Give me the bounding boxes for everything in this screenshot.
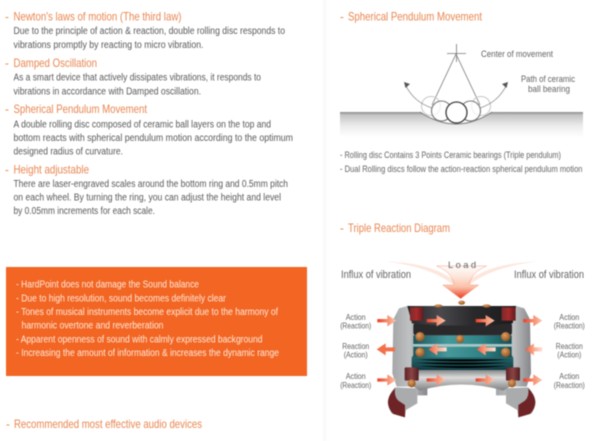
- lower black disc: [413, 323, 512, 335]
- teal discs: [413, 335, 512, 344]
- text: Damped Oscillation description: vibrations in accordance with Damped oscillation.: [14, 86, 201, 98]
- orange box background: [6, 267, 307, 376]
- heading: Spherical Pendulum Movement: Spherical Pendulum Movement: [14, 103, 148, 116]
- right side labels: Reaction: [556, 342, 583, 351]
- left side labels: (Reaction): [340, 322, 371, 331]
- right housing: [496, 306, 531, 395]
- benefits list: - Apparent openness of sound with calmly expressed background: [16, 334, 262, 346]
- ground surface: [340, 112, 583, 137]
- ceramic balls: [408, 301, 516, 387]
- text: Spherical Pendulum description: designed radius of curvature.: [14, 146, 123, 158]
- curved dent in ground: [420, 109, 492, 124]
- benefits list: - Increasing the amount of information & increases the dynamic range: [16, 348, 279, 359]
- panel: feature descriptions: Newton's laws of motion (The third law): [14, 10, 182, 24]
- panel: feature descriptions: -: [5, 103, 9, 116]
- text: Damped Oscillation description: As a smart device that actively dissipates vibrations, it responds to: [14, 72, 261, 84]
- benefits list: [16, 280, 279, 359]
- center of movement cross: [432, 44, 480, 105]
- threaded teal ring: [412, 355, 513, 370]
- ball bearings: [422, 96, 490, 123]
- top black disc: [407, 306, 516, 326]
- text: pendulum captions: [340, 150, 583, 174]
- influx labels: Influx of vibration: [341, 269, 411, 281]
- right side labels: [554, 313, 585, 390]
- benefits list: harmonic overtone and reverberation: [22, 320, 164, 332]
- text: Spherical Pendulum description: bottom reacts with spherical pendulum motion according to the optimum: [14, 133, 293, 144]
- label: center of movement: Center of movement: [481, 49, 553, 59]
- heading: Spherical Pendulum Movement (right): -: [340, 10, 344, 24]
- text: Newton's laws description: Due to the principle of action & reaction, double rolling disc responds to: [14, 26, 285, 37]
- text: Newton's laws description: vibrations promptly by reacting to micro vibration.: [14, 40, 204, 51]
- benefits list: - Tones of musical instruments become explicit due to the harmony of: [16, 307, 278, 318]
- text: Height adjustable description: [14, 179, 288, 217]
- text: Height adjustable description: on each wheel. By turning the ring, you can adjust the height and level: [14, 192, 281, 204]
- heading: Newton's laws: -: [5, 10, 9, 24]
- left side labels: Action: [346, 372, 366, 381]
- panel: feature descriptions: [5, 10, 293, 217]
- right side labels: (Reaction): [554, 381, 585, 390]
- text: Height adjustable description: There are laser-engraved scales around the bottom ring and 0.5mm pitch: [14, 179, 288, 190]
- heading: Triple Reaction Diagram: Triple Reaction Diagram: [348, 222, 450, 235]
- panel: feature descriptions: -: [5, 164, 9, 176]
- red threaded inserts: [410, 307, 423, 321]
- text: Spherical Pendulum description: A double rolling disc composed of ceramic ball layers on the top and: [14, 120, 271, 130]
- left side labels: (Reaction): [340, 381, 371, 390]
- panel: feature descriptions: -: [5, 57, 9, 70]
- left foot: [388, 387, 417, 417]
- text: pendulum captions: - Rolling disc Contains 3 Points Ceramic bearings (Triple pendulum): [340, 150, 561, 160]
- heading: Recommended audio devices: -: [6, 418, 10, 431]
- right side labels: Action: [559, 313, 580, 322]
- left housing: [392, 306, 427, 395]
- text: Damped Oscillation description: [14, 72, 261, 98]
- left side labels: (Action): [344, 351, 368, 360]
- text: Newton's laws description: [14, 26, 285, 51]
- left side labels: Reaction: [342, 342, 370, 351]
- left side labels: [340, 313, 371, 390]
- red pegs: [405, 367, 419, 381]
- label: path of ceramic ball bearing: Path of ceramic: [521, 74, 576, 84]
- right side labels: (Reaction): [554, 322, 585, 331]
- influx labels: Influx of vibration: [514, 269, 584, 281]
- heading: Spherical Pendulum Movement (right): Spherical Pendulum Movement: [348, 10, 483, 24]
- load label: Load: [448, 259, 478, 270]
- device cross-section: [388, 301, 535, 417]
- heading: Height adjustable: Height adjustable: [14, 164, 89, 176]
- text: Spherical Pendulum description: [14, 120, 293, 158]
- right side labels: (Action): [557, 351, 582, 360]
- left side labels: Action: [346, 313, 366, 322]
- right foot: [506, 387, 535, 417]
- influx labels: [341, 269, 584, 281]
- heading: Damped Oscillation: Damped Oscillation: [14, 57, 97, 70]
- heading: Triple Reaction Diagram: -: [340, 222, 344, 235]
- label: path of ceramic ball bearing: ball bearing: [528, 84, 570, 94]
- panel: orange benefits box: [6, 267, 307, 376]
- benefits list: - HardPoint does not damage the Sound balance: [16, 280, 199, 290]
- benefits list: - Due to high resolution, sound becomes definitely clear: [16, 294, 227, 304]
- action and reaction arrows: [377, 315, 542, 386]
- heading: Recommended audio devices: Recommended most effective audio devices: [14, 418, 202, 431]
- diagram: triple reaction: [340, 259, 585, 417]
- text: Height adjustable description: by 0.05mm increments for each scale.: [14, 206, 155, 217]
- load arrow: [387, 262, 537, 299]
- right side labels: Action: [559, 372, 580, 381]
- curved path arrows: [404, 82, 508, 108]
- lower ring: [413, 367, 510, 391]
- label: path of ceramic ball bearing: [521, 74, 576, 94]
- diagram: spherical pendulum: [340, 44, 583, 137]
